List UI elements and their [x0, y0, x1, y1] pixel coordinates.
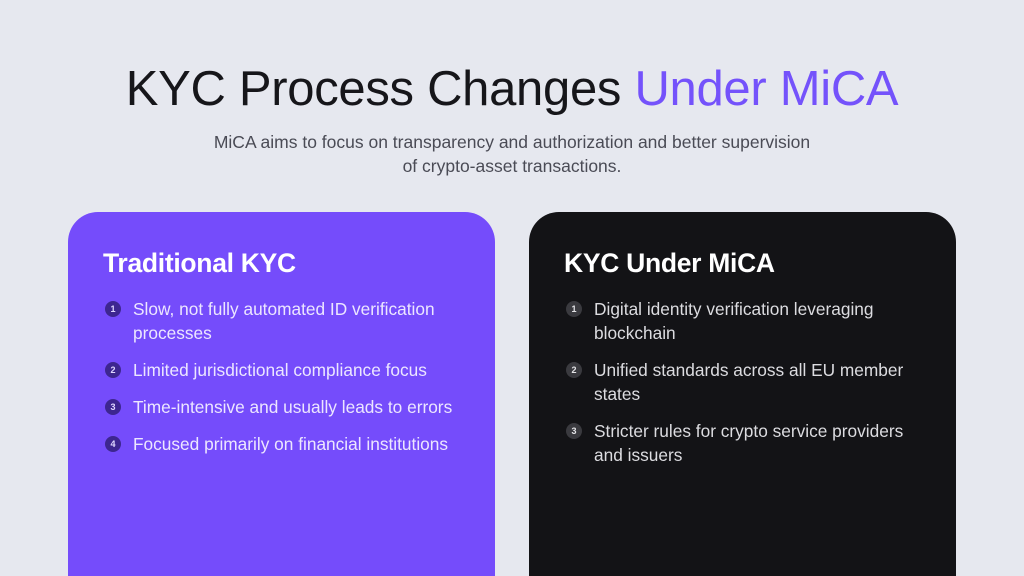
- list: traditional items: 2: [110, 365, 116, 375]
- list: traditional items: Focused primarily on financial institutions: [133, 434, 448, 454]
- subtitle: of crypto-asset transactions.: [403, 156, 621, 176]
- list: MiCA items: Unified standards across all EU member states: [594, 360, 903, 404]
- subtitle: [214, 132, 810, 176]
- list: MiCA items: 2: [571, 365, 576, 375]
- subtitle: MiCA aims to focus on transparency and authorization and better supervision: [214, 132, 810, 152]
- heading: traditional: Traditional KYC: [103, 248, 296, 278]
- panel: traditional KYC: [68, 212, 495, 576]
- list: traditional items: Time-intensive and usually leads to errors: [133, 397, 452, 417]
- list: MiCA items: 1: [571, 304, 576, 314]
- title: KYC Process Changes Under MiCA: [126, 62, 898, 116]
- list: MiCA items: Stricter rules for crypto service providers and issuers: [594, 421, 903, 465]
- list: traditional items: Limited jurisdictional compliance focus: [133, 360, 427, 380]
- list: MiCA items: 3: [571, 426, 576, 436]
- list: MiCA items: [566, 299, 903, 465]
- list: traditional items: Slow, not fully automated ID verification processes: [133, 299, 435, 343]
- panel: KYC under MiCA: [529, 212, 956, 576]
- list: traditional items: 4: [110, 439, 116, 449]
- list: traditional items: [105, 299, 452, 454]
- list: traditional items: 1: [110, 304, 116, 314]
- list: MiCA items: Digital identity verification leveraging blockchain: [594, 299, 874, 343]
- list: traditional items: 3: [110, 402, 116, 412]
- heading: MiCA: KYC Under MiCA: [564, 248, 775, 278]
